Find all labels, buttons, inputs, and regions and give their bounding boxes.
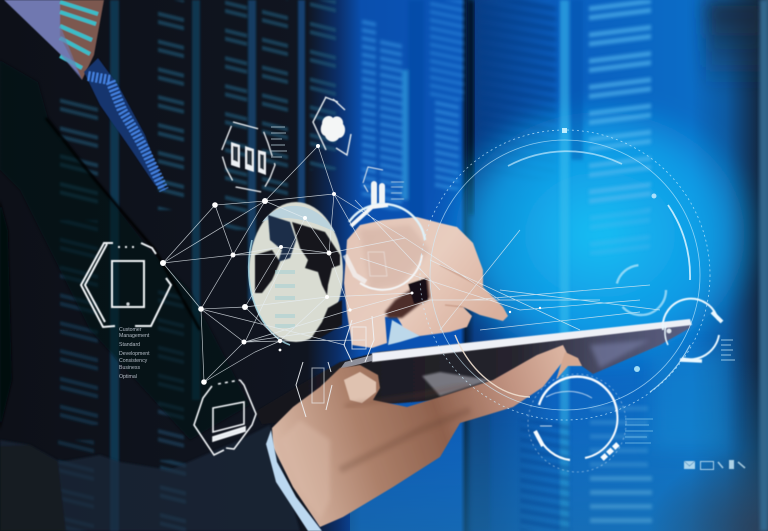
lower hand holding tablet — [272, 345, 582, 527]
globe hologram — [249, 202, 343, 345]
large holographic rings — [420, 128, 710, 420]
icon: handset — [738, 462, 745, 468]
necktie — [84, 58, 166, 192]
gauge text panel — [625, 419, 653, 443]
globe continents — [255, 215, 342, 340]
icon text list: Management — [119, 333, 150, 339]
icon text list — [119, 327, 150, 380]
icon: phone — [729, 460, 734, 469]
hexagon icon: cloud — [313, 97, 351, 155]
shirt cuff — [266, 430, 322, 531]
icon: link — [718, 462, 723, 468]
ring around finger — [345, 204, 425, 290]
hexagon icon: servers — [221, 122, 275, 192]
shirt collar and stripes — [4, 0, 104, 80]
lapel shadow edge — [46, 118, 200, 330]
icon text list: Standard — [119, 342, 140, 348]
lower circular gauge — [528, 374, 626, 472]
network lines and nodes — [160, 144, 660, 385]
upper hand pointing at tablet — [344, 217, 508, 348]
hexagon icon: tablet — [81, 243, 171, 327]
hexagon icon: document on finger — [363, 167, 404, 207]
icon text list: Optimal — [119, 374, 137, 380]
bottom-right toolbar icons — [684, 460, 745, 470]
small ring widget — [616, 265, 666, 315]
ring widget at tablet tip — [663, 299, 722, 361]
hexagon icon: laptop — [194, 380, 256, 455]
icon: monitor — [700, 462, 714, 470]
icon text list: Customer — [119, 327, 142, 333]
server labels — [271, 127, 287, 157]
icon text list: Business — [119, 365, 140, 371]
businessman suit — [0, 60, 300, 531]
icon text list: Development — [119, 351, 150, 357]
hexagon icon: phone on thumb — [296, 362, 332, 417]
icon: envelope — [684, 461, 695, 469]
ring widget labels — [721, 340, 735, 360]
hexagon icon: monitor on finger — [344, 316, 374, 362]
tablet computer — [255, 319, 692, 424]
icon text list: Consistency — [119, 358, 148, 364]
